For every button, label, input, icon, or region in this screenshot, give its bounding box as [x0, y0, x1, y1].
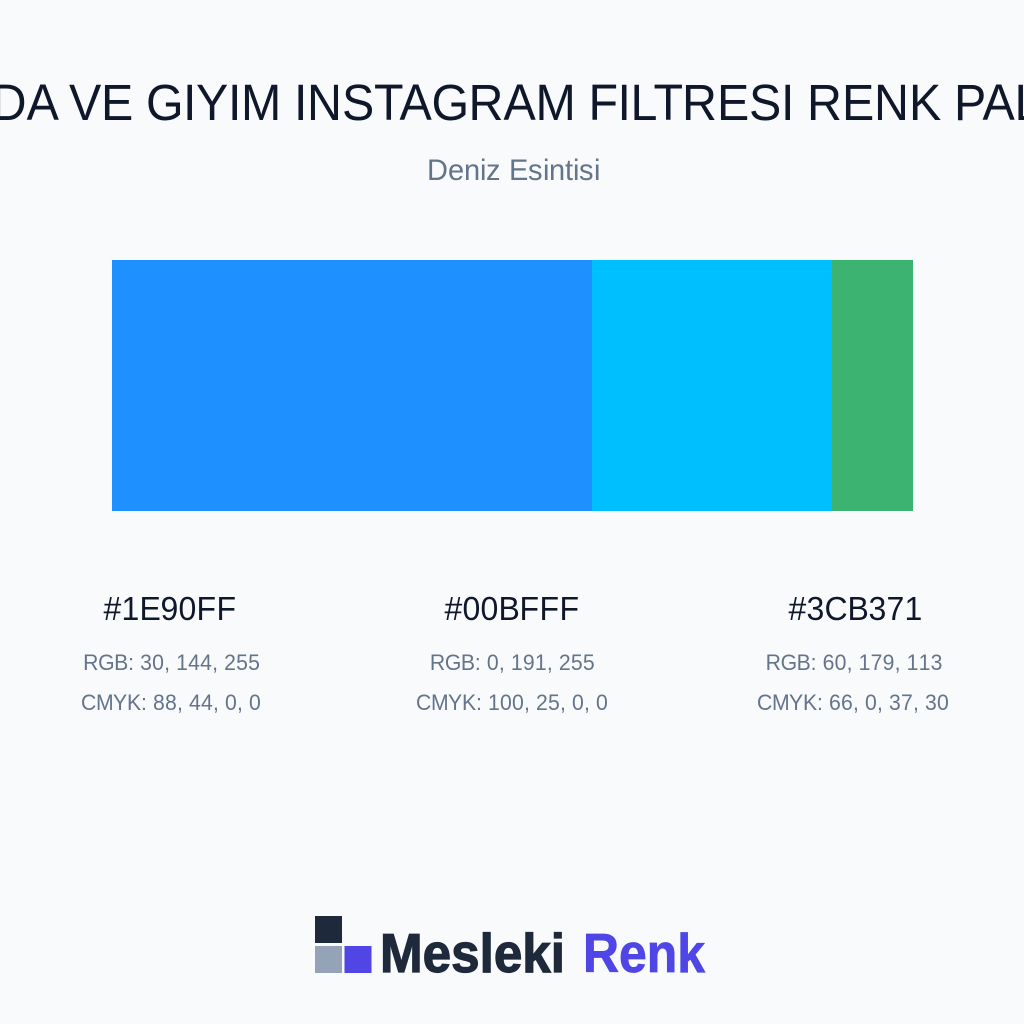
color info: #3CB371: CMYK: 66, 0, 37, 30 [757, 691, 949, 715]
swatch: deep sky blue [592, 260, 832, 511]
swatch: dodger blue [112, 260, 592, 511]
color info: #1E90FF: CMYK: 88, 44, 0, 0 [81, 691, 261, 715]
color info: #1E90FF [81, 591, 261, 715]
color info: #3CB371: RGB: 60, 179, 113 [766, 651, 942, 675]
color info: #00BFFF: #00BFFF [444, 591, 579, 627]
color info: #3CB371: #3CB371 [788, 591, 922, 627]
color info: #00BFFF [416, 591, 608, 715]
color info: #1E90FF: RGB: 30, 144, 255 [83, 651, 260, 675]
icon: logo squares [315, 916, 372, 973]
palette bar [112, 260, 913, 511]
logo wordmark: Mesleki [380, 922, 565, 984]
logo [315, 916, 705, 984]
color info: #3CB371 [757, 591, 949, 715]
subtitle: Deniz Esintisi [427, 154, 600, 187]
color info: #00BFFF: RGB: 0, 191, 255 [430, 651, 595, 675]
color info: #00BFFF: CMYK: 100, 25, 0, 0 [416, 691, 608, 715]
swatch: medium sea green [832, 260, 913, 511]
color info: #1E90FF: #1E90FF [104, 591, 236, 627]
logo wordmark accent: Renk [583, 922, 705, 984]
